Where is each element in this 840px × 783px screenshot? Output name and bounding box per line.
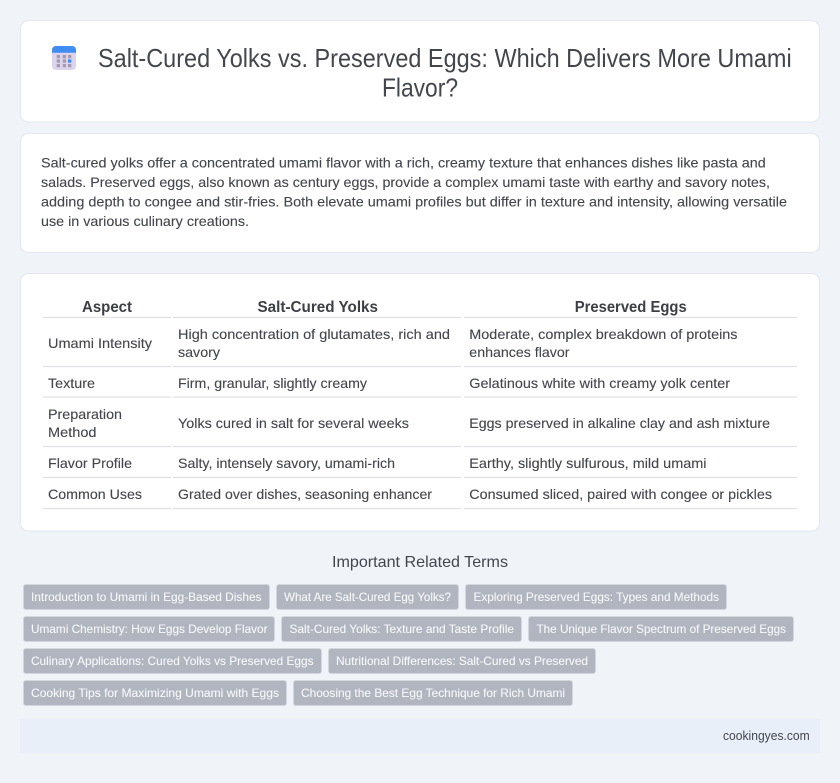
icon: calendar — [52, 46, 76, 70]
text block: description: use in various culinary creations. — [41, 213, 249, 229]
row: flavor profile: Flavor Profile — [48, 455, 132, 471]
row: preparation method: Yolks cured in salt for several weeks — [178, 415, 409, 431]
row: umami intensity: Moderate, complex breakdown of proteins — [469, 326, 738, 342]
tag: Introduction to Umami in Egg-Based Dishes — [31, 590, 262, 604]
text block: description — [41, 154, 787, 229]
row: common uses: Grated over dishes, seasoning enhancer — [178, 486, 432, 502]
row: texture: Gelatinous white with creamy yolk center — [469, 375, 730, 391]
tag — [528, 616, 794, 642]
row: preparation method: Eggs preserved in alkaline clay and ash mixture — [469, 415, 770, 431]
row: preparation method — [48, 406, 770, 440]
tag — [24, 584, 270, 610]
panel: title — [20, 20, 820, 122]
tag — [466, 584, 726, 610]
tag: Umami Chemistry: How Eggs Develop Flavor — [31, 622, 268, 636]
row: texture: Texture — [48, 375, 95, 391]
text block: description: adding depth to congee and stir-fries. Both elevate umami profiles but differ in texture and intensity, allowing versatile — [41, 194, 787, 210]
tag — [276, 584, 458, 610]
heading: Salt-Cured Yolks vs. Preserved Eggs: Which Delivers More Umami — [98, 45, 792, 73]
heading: important related terms: Important Related Terms — [332, 554, 508, 571]
tag — [24, 616, 274, 642]
tag: Culinary Applications: Cured Yolks vs Preserved Eggs — [31, 654, 314, 668]
tag — [282, 616, 522, 642]
row: umami intensity: savory — [178, 344, 220, 360]
row: umami intensity — [48, 326, 738, 360]
table header: Aspect — [82, 299, 133, 316]
row: common uses: Consumed sliced, paired with congee or pickles — [469, 486, 772, 502]
table header: Salt-Cured Yolks — [258, 299, 378, 316]
row: flavor profile — [48, 455, 706, 471]
table header — [82, 299, 687, 316]
row: umami intensity: High concentration of glutamates, rich and — [178, 326, 450, 342]
row: common uses — [48, 486, 772, 502]
tag — [294, 680, 572, 706]
row: flavor profile: Earthy, slightly sulfurous, mild umami — [469, 455, 706, 471]
tag: Cooking Tips for Maximizing Umami with Eggs — [31, 686, 279, 700]
panel: comparison table — [20, 274, 820, 531]
row: preparation method: Method — [48, 424, 96, 440]
row: texture: Firm, granular, slightly creamy — [178, 375, 367, 391]
row: texture — [48, 375, 730, 391]
row: umami intensity: Umami Intensity — [48, 335, 152, 351]
panel: description — [20, 134, 820, 252]
row: common uses: Common Uses — [48, 486, 142, 502]
footer: cookingyes.com — [723, 728, 810, 743]
row: umami intensity: enhances flavor — [469, 344, 570, 360]
tag: Salt-Cured Yolks: Texture and Taste Profile — [290, 622, 514, 636]
tag — [24, 680, 286, 706]
tag: Nutritional Differences: Salt-Cured vs Preserved — [336, 654, 588, 668]
tag: The Unique Flavor Spectrum of Preserved Eggs — [536, 622, 786, 636]
tag: Exploring Preserved Eggs: Types and Methods — [474, 590, 719, 604]
table header: Preserved Eggs — [575, 299, 687, 316]
row: preparation method: Preparation — [48, 406, 122, 422]
heading — [98, 45, 792, 102]
heading: Flavor? — [382, 74, 458, 102]
text block: description: Salt-cured yolks offer a concentrated umami flavor with a rich, creamy texture that enhances dishes like pasta and — [41, 154, 766, 170]
tag — [24, 648, 322, 674]
tag group: related terms — [24, 584, 794, 706]
tag — [328, 648, 596, 674]
text block: description: salads. Preserved eggs, also known as century eggs, provide a complex umami taste with earthy and savory notes, — [41, 174, 770, 190]
footer — [20, 719, 820, 753]
tag: Choosing the Best Egg Technique for Rich Umami — [301, 686, 565, 700]
tag: What Are Salt-Cured Egg Yolks? — [284, 590, 451, 604]
row: flavor profile: Salty, intensely savory, umami-rich — [178, 455, 395, 471]
